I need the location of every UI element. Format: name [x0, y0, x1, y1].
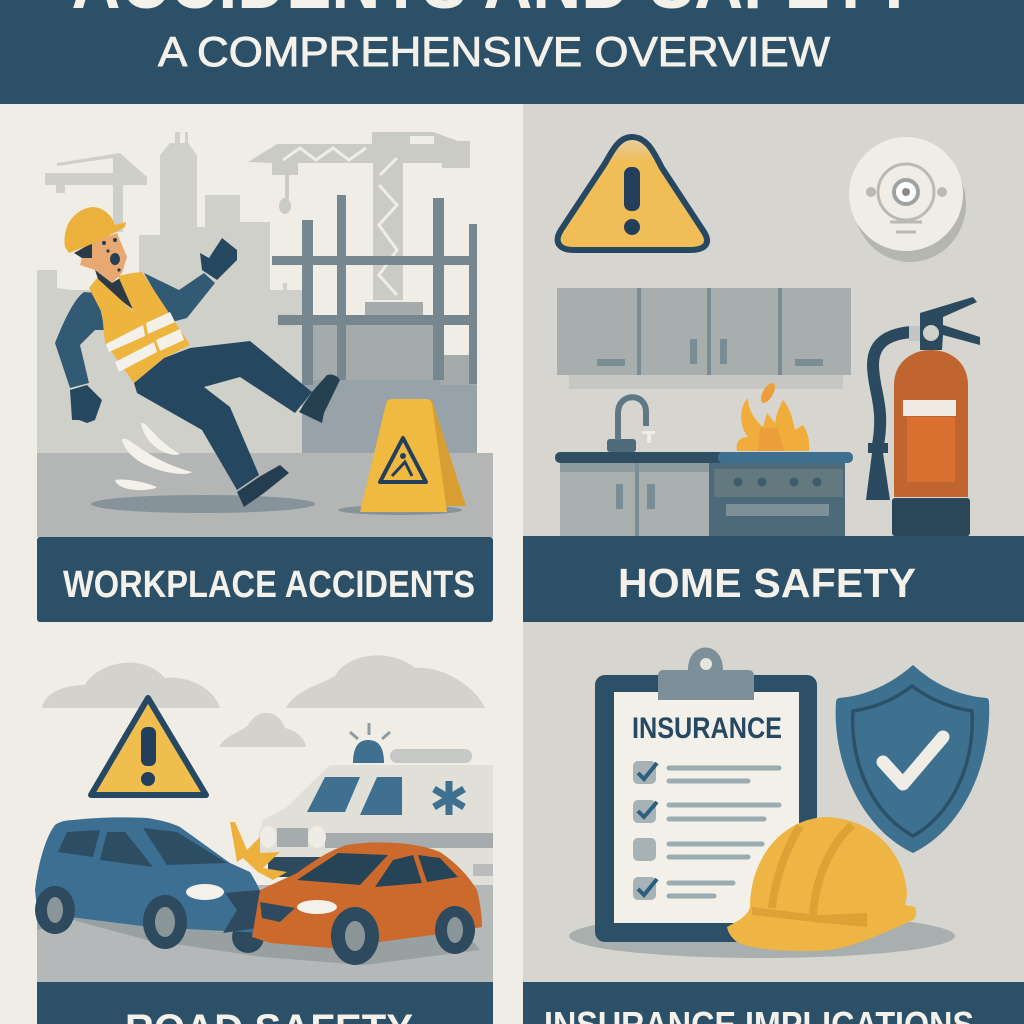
icon: warning triangle	[91, 698, 206, 795]
base	[892, 498, 970, 536]
cylinder	[894, 350, 968, 497]
icon: blue car	[35, 817, 264, 953]
label bar	[523, 536, 1024, 622]
checklist	[633, 761, 779, 900]
icon: fire extinguisher	[866, 297, 980, 536]
trousers	[134, 341, 312, 490]
clipboard heading: INSURANCE	[632, 712, 782, 745]
illustration: countertop	[555, 452, 853, 463]
icon: flame	[737, 381, 809, 451]
header band	[0, 0, 1024, 104]
subtitle: A COMPREHENSIVE OVERVIEW	[158, 28, 830, 75]
icon: shield	[836, 665, 989, 853]
icon: faucet	[607, 397, 655, 452]
illustration: road	[37, 885, 493, 982]
vest	[89, 272, 190, 383]
icon: ambulance	[258, 723, 493, 887]
icon: crash spark	[230, 822, 287, 880]
hose	[873, 332, 912, 445]
icon: smoke detector	[849, 137, 966, 262]
illustration: grey skyline	[37, 132, 302, 453]
icon: falling worker	[55, 207, 340, 507]
illustration: ground	[37, 453, 493, 537]
label bar	[523, 982, 1024, 1024]
icon: wet floor sign	[360, 399, 466, 512]
icon: clipboard	[595, 648, 817, 942]
illustration: concrete block	[302, 302, 477, 453]
illustration: upper cabinets	[557, 288, 851, 389]
arms	[55, 292, 105, 388]
label text: WORKPLACE ACCIDENTS	[63, 564, 475, 606]
label bar	[37, 537, 493, 622]
panel: road safety	[35, 655, 493, 1024]
icon: warning triangle	[558, 137, 707, 250]
helmet	[64, 207, 126, 253]
valve	[920, 297, 980, 350]
icon: orange car	[252, 842, 482, 965]
panel: home safety	[523, 137, 1024, 622]
icon: hard hat	[727, 817, 916, 951]
illustration: lower cabinets	[560, 462, 709, 536]
panel: insurance implications	[523, 648, 1024, 1024]
illustration: building frame	[272, 195, 477, 385]
icon: slip marks	[115, 423, 192, 490]
face details	[102, 238, 121, 272]
panel: workplace accidents	[37, 132, 493, 622]
illustration: stove	[709, 462, 845, 536]
head	[80, 233, 127, 283]
boots	[299, 375, 340, 423]
label text: HOME SAFETY	[618, 560, 916, 606]
label bar	[37, 982, 493, 1024]
nozzle	[866, 443, 890, 500]
illustration: ground shadow	[569, 914, 955, 958]
illustration: distant crane	[45, 153, 147, 232]
illustration: large crane	[248, 132, 470, 300]
hair and collar	[74, 243, 134, 310]
gloves	[70, 385, 102, 423]
illustration: clouds	[42, 655, 485, 747]
